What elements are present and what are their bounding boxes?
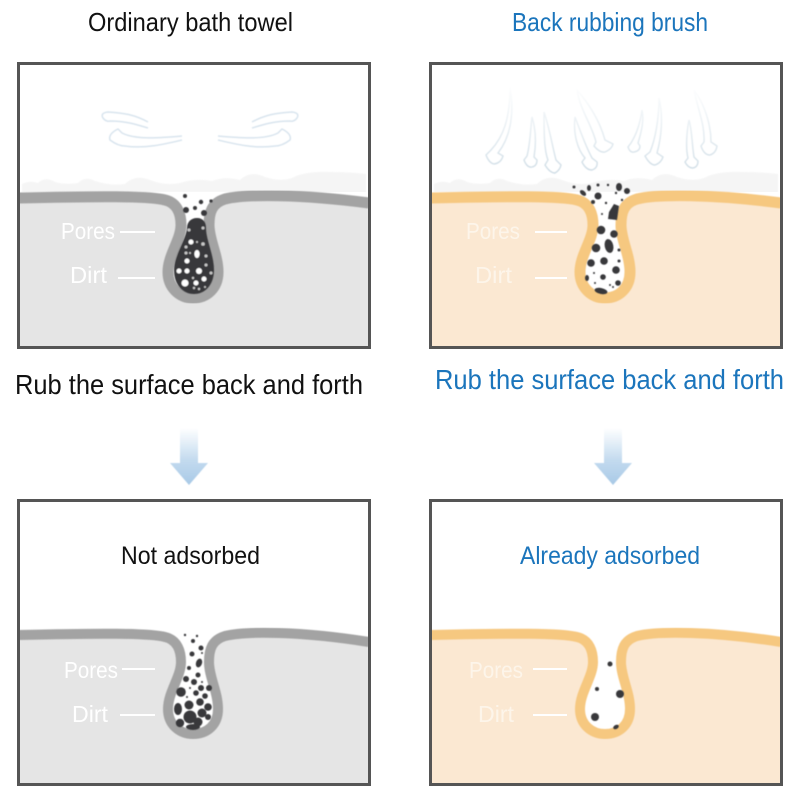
panel: towel before <box>17 63 371 348</box>
skin: gray <box>19 635 369 783</box>
label: pores: Pores <box>466 218 520 244</box>
skin surface and pore wall <box>19 633 369 734</box>
label: dirt <box>475 262 567 288</box>
pore opening <box>431 625 781 734</box>
dust layer <box>22 172 366 198</box>
label: pores: Pores <box>64 657 118 683</box>
dirt left behind <box>174 634 212 730</box>
small amount of dirt remaining <box>591 662 624 730</box>
pore opening <box>19 625 369 734</box>
label: dirt: Dirt <box>475 262 513 288</box>
pore opening <box>431 192 781 298</box>
skin surface and pore wall <box>431 196 781 298</box>
skin surface and pore wall <box>19 196 369 298</box>
label: pores <box>466 218 567 244</box>
trapped dirt <box>174 194 214 294</box>
brush arrows: pressing down <box>486 87 717 173</box>
skin: gray <box>19 198 369 346</box>
frame <box>18 500 370 784</box>
frame <box>430 64 782 348</box>
panel: brush before <box>429 63 783 348</box>
label: pores: Pores <box>61 218 115 244</box>
label: dirt <box>478 701 567 727</box>
result text: already adsorbed: Already adsorbed <box>520 542 700 570</box>
skin: peach <box>431 198 781 346</box>
label: dirt: Dirt <box>72 701 109 727</box>
arrow: towel result <box>170 428 208 485</box>
dirt being lifted <box>572 183 630 295</box>
skin surface and pore wall <box>431 633 781 734</box>
frame <box>18 64 370 348</box>
arrow: brush result <box>594 428 632 485</box>
wind arrows: back and forth <box>102 112 298 147</box>
label: pores <box>64 657 155 683</box>
dust layer <box>434 172 778 198</box>
result text: not adsorbed: Not adsorbed <box>121 542 260 570</box>
caption: towel action: Rub the surface back and forth <box>15 369 363 400</box>
label: dirt <box>70 262 155 288</box>
heading: ordinary bath towel: Ordinary bath towel <box>88 7 293 37</box>
label: dirt <box>72 701 155 727</box>
label: pores <box>61 218 155 244</box>
label: pores <box>469 657 567 683</box>
frame <box>430 500 782 784</box>
pore opening <box>19 192 369 298</box>
label: pores: Pores <box>469 657 523 683</box>
panel: brush after <box>429 499 783 785</box>
label: dirt: Dirt <box>478 701 515 727</box>
panel: towel after <box>17 499 371 785</box>
skin: peach <box>431 635 781 783</box>
label: dirt: Dirt <box>70 262 108 288</box>
heading: back rubbing brush: Back rubbing brush <box>512 7 708 37</box>
